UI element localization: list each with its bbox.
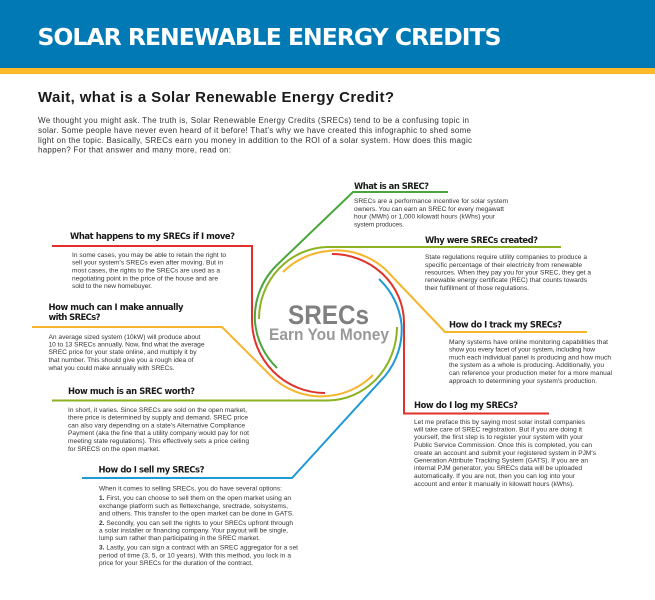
central label <box>269 300 390 344</box>
line: how do I log <box>332 254 549 414</box>
panel: why were SRECs created: renewable energy certificate (REC) that counts towards <box>425 277 588 284</box>
panel: how much is an SREC worth: In short, it varies. Since SRECs are sold on the open market, <box>68 407 247 414</box>
panel: what is an SREC: SRECs are a performance incentive for solar system <box>354 198 508 205</box>
panel: how much is an SREC worth: meeting state regulations). This effectively sets a price ceiling <box>68 438 249 445</box>
panel: how do I sell my SRECs: 3. Lastly, you can sign a contract with an SREC aggregator for a set <box>99 544 298 552</box>
panel: how do I sell my SRECs: When it comes to selling SRECs, you do have several options: <box>99 486 282 492</box>
panel: what happens to my SRECs if I move: sold to the new homebuyer. <box>72 283 152 290</box>
panel: how much can I make annually: An average sized system (10kW) will produce about <box>48 334 201 341</box>
panel: how much can I make annually: 10 to 13 SRECs annually. Now, find what the average <box>48 342 205 348</box>
panel: how much can I make annually: that number. This should give you a rough idea of <box>48 357 194 364</box>
panel: what happens to my SRECs if I move: most cases, the rights to the SRECs are used as a <box>72 268 220 274</box>
line: how do I track <box>283 250 587 332</box>
panel: what is an SREC: owners. You can earn an SREC for every megawatt <box>354 206 504 213</box>
line: how much is an SREC worth <box>52 327 397 400</box>
panel: how do I track my SRECs: much each individual panel is producing and how much <box>449 354 611 362</box>
panel: how much can I make annually: what you could make annually with SRECs. <box>48 365 175 372</box>
line: why were SRECs created <box>259 247 561 319</box>
panel: how do I sell my SRECs: How do I sell my SRECs? <box>98 464 205 474</box>
central label: SRECs <box>288 300 369 330</box>
panel: what is an SREC: hour (MWh) or 1,000 kilowatt hours (kWhs) your <box>354 214 496 220</box>
panel: why were SRECs created: specific percentage of their electricity from renewable <box>425 262 582 269</box>
panel: why were SRECs created: State regulations require utility companies to produce a <box>425 254 587 261</box>
panel: how much is an SREC worth <box>68 386 249 453</box>
panel: how do I log my SRECs <box>413 400 597 488</box>
panel: what is an SREC: What is an SREC? <box>354 181 429 191</box>
panel: how do I sell my SRECs: a solar installer or financing company. Your payout will be single, <box>99 528 288 534</box>
panel: how do I sell my SRECs: exchange platform such as flettexchange, srectrade, solsystems, <box>99 503 288 510</box>
panel: how much can I make annually: with SRECs? <box>48 312 101 322</box>
line: how much annually <box>32 327 373 396</box>
panel: how do I log my SRECs: Public Service Commission. Once this is completed, you can <box>414 442 592 449</box>
central label: Earn You Money <box>269 326 390 344</box>
panel: how much is an SREC worth: Payment (aka the fine that a utility company would pay for not <box>68 430 249 437</box>
panel: how do I sell my SRECs: lump sum rather than participating in the SREC market. <box>99 535 260 542</box>
panel: how do I log my SRECs: create an account and submit your registered system in PJM's <box>414 450 597 457</box>
header banner <box>0 0 655 74</box>
panel: how do I sell my SRECs: 1. First, you can choose to sell them on the open market using an <box>99 495 291 502</box>
panel: what happens to my SRECs if I move: negotiating point in the price of the house and are <box>72 276 218 282</box>
panel: why were SRECs created: their fulfillment of those regulations. <box>425 285 529 292</box>
panel: why were SRECs created <box>425 235 591 292</box>
panel: how do I sell my SRECs: and others. This transfer to the open market can be done in GATS. <box>99 510 294 518</box>
panel: how much can I make annually: SREC price for your state online, and multiply it by <box>48 349 197 356</box>
panel: how do I track my SRECs: show you every facet of your system, including how <box>449 346 595 354</box>
panel: how do I log my SRECs: yourself, the first step is to register your system with your <box>414 434 584 441</box>
intro paragraph: light on the topic. Basically, SRECs earn you money in addition to the ROI of a solar system. How does this magic <box>38 136 472 145</box>
panel: how do I log my SRECs: Let me preface this by saying most solar install companies <box>414 419 586 426</box>
intro paragraph <box>38 116 472 154</box>
panel: how do I log my SRECs: Generation Attribute Tracking System (GATS). If you are an <box>414 458 588 464</box>
panel: how do I sell my SRECs: 2. Secondly, you can sell the rights to your SRECs upfront through <box>99 520 293 527</box>
line: how do I sell <box>82 279 402 478</box>
panel: why were SRECs created: resources. When they pay you for your SREC, they get a <box>425 270 591 276</box>
panel: what is an SREC <box>354 181 508 228</box>
panel: how do I track my SRECs: How do I track my SRECs? <box>449 320 562 330</box>
panel: how much can I make annually <box>48 302 205 372</box>
panel: how do I log my SRECs: automatically. If you are not, then you can log into your <box>414 473 576 480</box>
panel: how do I sell my SRECs <box>98 464 298 567</box>
panel: how do I log my SRECs: internal PJM generator, you SRECs data will be uploaded <box>414 465 582 472</box>
panel: how much is an SREC worth: can also vary depending on a state's Alternative Compliance <box>68 422 245 430</box>
panel: how much can I make annually: How much can I make annually <box>48 302 184 312</box>
central diagram: connector lines <box>32 192 587 478</box>
intro heading: Wait, what is a Solar Renewable Energy Credit? <box>38 89 394 106</box>
panel: what happens to my SRECs if I move: In some cases, you may be able to retain the right to <box>72 252 226 259</box>
panel: what happens to my SRECs if I move <box>70 231 235 290</box>
panel: what is an SREC: system produces. <box>354 222 404 228</box>
line: what is an SREC <box>255 192 448 368</box>
title: SOLAR RENEWABLE ENERGY CREDITS <box>38 23 502 51</box>
panel: how much is an SREC worth: for SRECS on the open market. <box>68 446 160 453</box>
line: what happens if I move <box>52 246 325 393</box>
panel: how do I log my SRECs: account and enter it manually in kilowatt hours (kWhs). <box>414 481 574 488</box>
panel: how do I log my SRECs: How do I log my SRECs? <box>414 400 518 410</box>
panel: how do I sell my SRECs: period of time (3, 5, or 10 years). With this method, you lock in a <box>99 552 291 560</box>
panel: what happens to my SRECs if I move: What happens to my SRECs if I move? <box>70 231 235 241</box>
panel: how do I track my SRECs: can reference your production meter for a more manual <box>449 370 613 377</box>
intro paragraph: happen? For that answer and many more, read on: <box>38 146 231 154</box>
panel: how much is an SREC worth: How much is an SREC worth? <box>68 386 195 396</box>
intro paragraph: We thought you might ask. The truth is, Solar Renewable Energy Credits (SRECs) tend to be a confusing topic in <box>38 116 469 125</box>
panel: how do I sell my SRECs: price for your SRECs for the duration of the contract. <box>99 560 253 567</box>
panel: how much is an SREC worth: there price is determined by supply and demand. SREC price <box>68 414 248 422</box>
panel: why were SRECs created: Why were SRECs created? <box>425 235 538 245</box>
panel: how do I log my SRECs: will take care of SREC registration. But if you are doing it <box>413 426 582 434</box>
panel: how do I track my SRECs <box>449 320 613 385</box>
panel: what happens to my SRECs if I move: sell your system's SRECs even after moving. But in <box>72 260 223 266</box>
intro paragraph: solar. Some people have never even heard of it before! That's why we have created this infographic to shed some <box>38 126 472 135</box>
panel: how do I track my SRECs: Many systems have online monitoring capabilities that <box>449 339 608 346</box>
panel: how do I track my SRECs: approach to determining your system's production. <box>449 378 597 385</box>
panel: how do I track my SRECs: the system as a whole is producing. Additionally, you <box>449 362 604 369</box>
